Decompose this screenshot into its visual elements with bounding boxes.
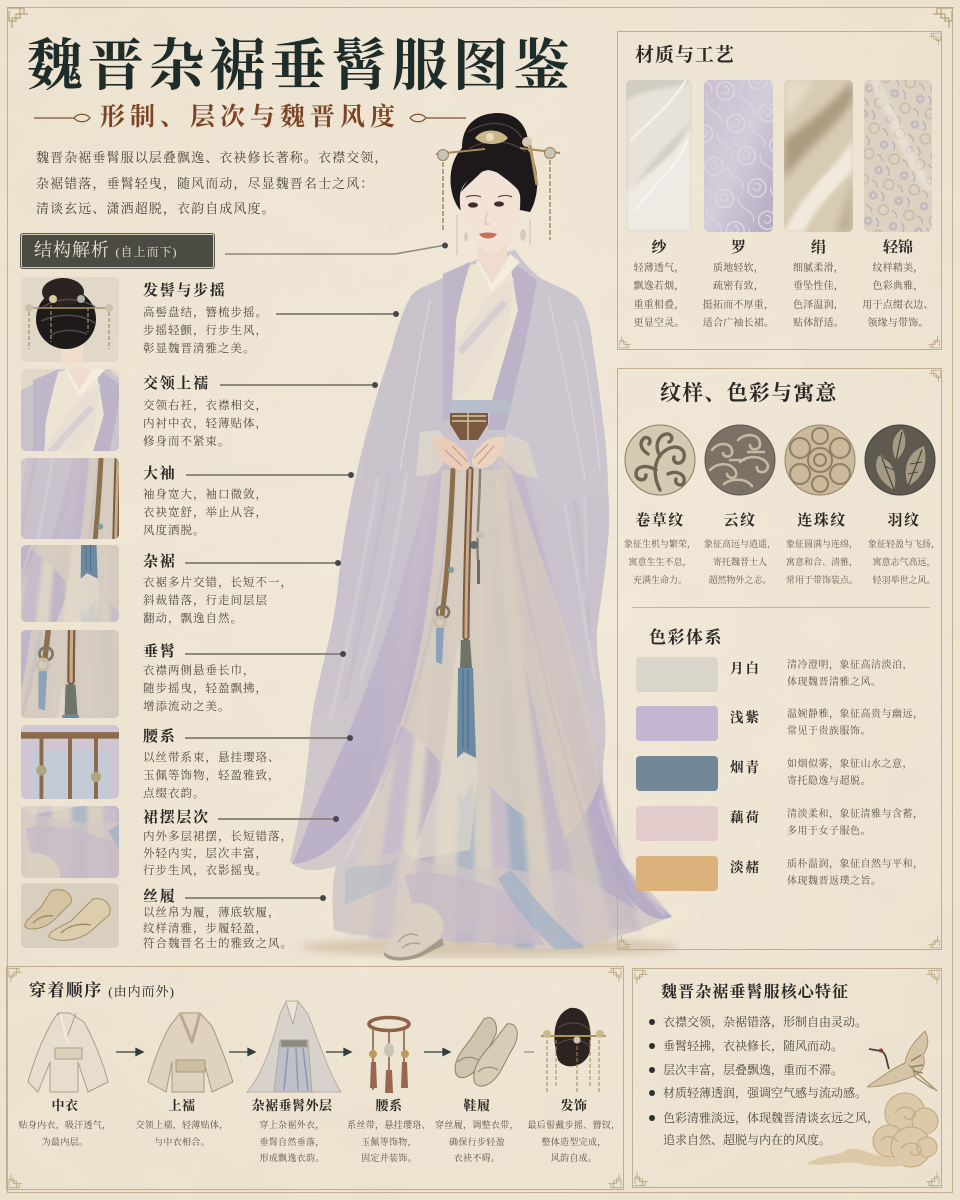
item description: 彰显魏晋清雅之美。 bbox=[143, 343, 256, 355]
item description bbox=[143, 488, 268, 537]
colour row: 浅紫 bbox=[636, 706, 926, 742]
arrow bbox=[228, 1048, 254, 1055]
name: 烟青 bbox=[730, 760, 761, 775]
step name: 中衣 bbox=[51, 1098, 78, 1113]
item description: 内衬中衣，轻薄贴体， bbox=[143, 418, 268, 430]
waist belt bbox=[450, 400, 510, 413]
description: 用于点缀衣边、 bbox=[862, 300, 934, 311]
item description: 内外多层裙摆，长短错落， bbox=[143, 831, 293, 843]
description bbox=[787, 707, 924, 740]
divider bbox=[632, 607, 930, 608]
sheer robe silhouette bbox=[290, 250, 672, 949]
heading: 魏晋杂裾垂髾服核心特征 bbox=[661, 984, 849, 1001]
step text: 衣袂不碍。 bbox=[454, 1153, 500, 1163]
description: 寓意志气高远， bbox=[872, 557, 936, 567]
description: 象征轻盈与飞扬， bbox=[868, 539, 940, 549]
description: 更显空灵。 bbox=[634, 318, 684, 329]
intro text: 清谈玄远、潇洒超脱，衣韵自成风度。 bbox=[36, 201, 276, 216]
swatch bbox=[636, 706, 718, 741]
item description bbox=[143, 399, 268, 448]
description bbox=[787, 757, 913, 790]
step name: 鞋履 bbox=[463, 1098, 490, 1113]
panel: patterns and colours bbox=[617, 368, 942, 950]
swatch bbox=[864, 80, 932, 232]
description: 色彩典雅， bbox=[872, 281, 924, 292]
step text: 整体造型完成， bbox=[541, 1136, 607, 1146]
cloud decoration bbox=[805, 1091, 939, 1177]
title: 魏晋杂裾垂髾服图鉴 bbox=[27, 36, 574, 98]
structure item: 裙摆层次 bbox=[21, 806, 339, 878]
item description: 以丝帛为履，薄底软履， bbox=[143, 907, 280, 919]
ornament: left scroll line bbox=[34, 114, 91, 122]
pattern: 云纹 bbox=[704, 424, 776, 594]
neck bbox=[478, 240, 508, 284]
description bbox=[793, 262, 844, 329]
item heading: 丝履 bbox=[143, 889, 176, 905]
step: 上襦 bbox=[132, 1097, 232, 1167]
description bbox=[634, 262, 684, 329]
description: 多用于女子服色。 bbox=[787, 826, 871, 836]
description bbox=[778, 535, 866, 589]
label: 卷草纹 bbox=[635, 513, 685, 529]
item heading: 交领上襦 bbox=[143, 376, 210, 392]
medallion bbox=[624, 424, 696, 496]
item description bbox=[143, 664, 268, 713]
label: 羽纹 bbox=[887, 513, 920, 529]
description: 领缘与带饰。 bbox=[867, 318, 929, 329]
description: 疏密有致， bbox=[713, 281, 764, 292]
label: 纱 bbox=[651, 240, 666, 256]
crane decoration bbox=[867, 1031, 939, 1093]
upper robe left bbox=[363, 268, 460, 480]
intro text: 魏晋杂裾垂髾服以层叠飘逸、衣袂修长著称。衣襟交领， bbox=[36, 150, 389, 165]
description: 贴体舒适。 bbox=[793, 318, 844, 329]
description: 象征圆满与连绵， bbox=[786, 539, 858, 549]
left lapel band bbox=[443, 262, 470, 420]
description: 温婉静雅，象征高贵与幽远， bbox=[787, 709, 924, 720]
step name: 腰系 bbox=[375, 1098, 402, 1113]
colour row: 淡赭 bbox=[636, 856, 926, 892]
description bbox=[616, 535, 704, 589]
item description: 纹样清雅，步履轻盈， bbox=[143, 923, 268, 935]
description: 常用于带饰装点。 bbox=[786, 575, 858, 585]
description: 飘逸若烟， bbox=[634, 281, 684, 292]
garment: 中衣 bbox=[28, 1012, 108, 1092]
material: 罗 bbox=[703, 80, 774, 329]
thumbnail: skirt bbox=[21, 545, 119, 622]
intro text: 杂裾错落，垂髾轻曳，随风而动，尽显魏晋名士之风： bbox=[36, 176, 374, 190]
pattern: 羽纹 bbox=[864, 424, 936, 594]
colour row: 烟青 bbox=[636, 756, 926, 792]
description: 体现魏晋清雅之风。 bbox=[787, 676, 882, 688]
item description: 高髻盘结，簪梳步摇。 bbox=[143, 307, 268, 319]
item description: 增添流动之美。 bbox=[143, 701, 230, 713]
swatch bbox=[636, 806, 718, 841]
waist sash bbox=[368, 1017, 408, 1092]
arrow bbox=[424, 1048, 450, 1055]
step: 发饰 bbox=[524, 1097, 624, 1167]
hands bbox=[432, 437, 470, 470]
label: 罗 bbox=[731, 240, 746, 256]
thumbnail: hanging ribbons bbox=[21, 630, 119, 718]
description bbox=[858, 260, 938, 334]
face bbox=[460, 170, 520, 254]
bullet 1: 衣襟交领，杂裾错落，形制自由灵动。 bbox=[663, 1015, 867, 1029]
description: 质朴温润，象征自然与平和， bbox=[787, 859, 924, 870]
description: 适合广袖长裙。 bbox=[703, 318, 774, 329]
label: 绢 bbox=[811, 240, 826, 256]
structure item: 发髻与步摇 bbox=[21, 277, 399, 362]
step text: 系丝带，悬挂璎珞、 bbox=[347, 1120, 431, 1130]
item heading: 发髻与步摇 bbox=[143, 283, 227, 299]
description: 寓意和合、清雅， bbox=[786, 557, 858, 567]
item description: 修身而不紧束。 bbox=[143, 436, 230, 448]
bullet 5: 追求自然、超脱与内在的风度。 bbox=[663, 1133, 831, 1147]
description bbox=[696, 535, 784, 589]
description: 质地轻软， bbox=[713, 263, 764, 274]
step: 鞋履 bbox=[427, 1097, 527, 1167]
leader line bbox=[220, 384, 375, 386]
step text bbox=[339, 1117, 439, 1166]
item description: 随步摇曳，轻盈飘拂， bbox=[143, 683, 268, 695]
item description: 点缀衣韵。 bbox=[143, 788, 206, 800]
description: 重重相叠， bbox=[634, 300, 684, 311]
step text: 贴身内衣，吸汗透气， bbox=[18, 1120, 112, 1130]
pattern: 连珠纹 bbox=[784, 424, 856, 594]
label: 轻锦 bbox=[883, 240, 913, 256]
name: 淡赭 bbox=[730, 860, 761, 875]
heading: 材质与工艺 bbox=[635, 45, 735, 66]
bullet 2: 垂髾轻拂，衣袂修长，随风而动。 bbox=[663, 1039, 843, 1053]
step: 中衣 bbox=[15, 1097, 115, 1167]
bullet 4: 材质轻薄透润，强调空气感与流动感。 bbox=[663, 1086, 867, 1100]
colour row: 藕荷 bbox=[636, 806, 926, 842]
structure item: 杂裾 bbox=[21, 545, 341, 625]
item heading: 大袖 bbox=[143, 466, 176, 482]
right lapel band bbox=[488, 252, 537, 430]
description: 细腻柔滑， bbox=[793, 263, 844, 274]
front cream panel bbox=[400, 470, 540, 825]
description: 清冷澄明，象征高洁淡泊， bbox=[787, 660, 913, 671]
panel: materials bbox=[617, 31, 942, 350]
bullet list bbox=[633, 1009, 903, 1159]
lower lilac tier bbox=[405, 873, 545, 945]
description: 寄托魏晋士人 bbox=[713, 557, 767, 567]
thumbnail: collar bbox=[21, 369, 119, 451]
medallion bbox=[704, 424, 776, 496]
leader line bbox=[185, 897, 323, 898]
blue hem tail bbox=[498, 870, 585, 950]
garment: 上襦 bbox=[148, 1012, 232, 1092]
ground shadow bbox=[300, 937, 680, 957]
lavender band left bbox=[292, 420, 452, 864]
description bbox=[703, 262, 774, 329]
label: 连珠纹 bbox=[797, 513, 847, 529]
crossed collar bbox=[476, 254, 520, 292]
step text: 穿丝履，调整衣带， bbox=[435, 1120, 519, 1130]
description: 寓意生生不息， bbox=[628, 557, 692, 567]
ornament: right scroll line bbox=[409, 114, 466, 122]
step text: 最后髻戴步摇、簪钗， bbox=[527, 1120, 620, 1130]
swatch bbox=[636, 856, 718, 891]
thumbnail: sleeve bbox=[21, 458, 119, 539]
garment: 杂裾垂髾外层 bbox=[246, 1000, 340, 1092]
hair ornament bbox=[436, 130, 560, 255]
leader line bbox=[185, 562, 338, 564]
item description: 斜裁错落，行走间层层 bbox=[143, 595, 268, 607]
item description: 交领右衽，衣襟相交， bbox=[143, 400, 268, 412]
leader line bbox=[185, 737, 350, 738]
swatch bbox=[784, 80, 853, 232]
leader line bbox=[276, 313, 396, 314]
shoes bbox=[455, 1017, 517, 1086]
description: 色泽温润， bbox=[793, 300, 844, 311]
step text bbox=[427, 1117, 527, 1166]
step text: 穿上杂裾外衣， bbox=[259, 1120, 325, 1130]
subtitle with ornaments bbox=[34, 103, 466, 131]
swatch bbox=[636, 657, 718, 692]
description: 挺拓而不厚重， bbox=[703, 300, 774, 311]
thumbnail: hair back view bbox=[21, 277, 119, 362]
inner cream bodice bbox=[452, 258, 525, 405]
badge heading: 结构解析 (自上而下) bbox=[34, 240, 178, 260]
description: 轻薄透气， bbox=[634, 263, 684, 274]
item description: 袖身宽大，袖口微敛， bbox=[143, 489, 268, 501]
description: 清淡柔和，象征清雅与含蓄， bbox=[787, 809, 924, 820]
step text: 为最内层。 bbox=[42, 1136, 88, 1146]
description: 超然物外之志。 bbox=[708, 575, 772, 585]
structure item: 交领上襦 bbox=[21, 369, 378, 451]
description: 充满生命力。 bbox=[633, 575, 687, 585]
description: 寄托隐逸与超脱。 bbox=[787, 776, 871, 786]
item description: 以丝带系束，悬挂璎珞、 bbox=[143, 752, 280, 764]
sequence illustrations bbox=[6, 966, 624, 1190]
hair ornament bbox=[540, 1007, 606, 1094]
section badge: 结构解析 bbox=[21, 234, 214, 268]
description bbox=[787, 857, 924, 890]
material: 纱 bbox=[626, 80, 692, 329]
swatch bbox=[636, 756, 718, 791]
right tan sheer panel bbox=[497, 430, 600, 840]
step name: 发饰 bbox=[560, 1098, 588, 1113]
description: 体现魏晋返璞之旨。 bbox=[787, 876, 882, 886]
step text: 玉佩等饰物， bbox=[361, 1136, 417, 1146]
label: 云纹 bbox=[723, 513, 756, 529]
fold lines bbox=[330, 330, 665, 915]
step text bbox=[242, 1117, 342, 1166]
skirt layered strips bbox=[345, 470, 640, 948]
step text: 固定并装饰。 bbox=[361, 1153, 417, 1163]
step text: 交领上襦，轻薄贴体， bbox=[135, 1120, 228, 1130]
upper robe right bbox=[497, 262, 608, 505]
structure item: 丝履 bbox=[21, 883, 326, 950]
small arrow bbox=[524, 1050, 534, 1052]
pattern: 卷草纹 bbox=[624, 424, 696, 594]
description: 象征生机与繁荣， bbox=[624, 539, 696, 549]
item description: 衣袂宽舒，举止从容， bbox=[143, 507, 268, 519]
item description: 风度洒脱。 bbox=[143, 525, 206, 537]
tassel bbox=[460, 640, 472, 668]
description: 纹样精美， bbox=[872, 263, 924, 274]
item description: 外轻内实，层次丰富， bbox=[143, 848, 268, 860]
item description: 玉佩等饰物，轻盈雅致， bbox=[143, 770, 280, 782]
bullet 5: 色彩清雅淡远，体现魏晋清谈玄远之风， bbox=[663, 1111, 879, 1125]
step text: 垂髾自然垂落， bbox=[259, 1136, 325, 1146]
bullet 3: 层次丰富，层叠飘逸，重而不滞。 bbox=[663, 1063, 843, 1077]
description: 轻羽举世之风。 bbox=[872, 575, 936, 585]
thumbnail: hem layers bbox=[21, 806, 119, 878]
item description: 衣裾多片交错，长短不一， bbox=[143, 577, 293, 589]
item description: 行步生风，衣影摇曳。 bbox=[143, 865, 268, 877]
item description: 符合魏晋名士的雅致之风。 bbox=[143, 938, 293, 950]
material: 轻锦 bbox=[864, 80, 932, 330]
panel: dressing order bbox=[6, 966, 624, 1190]
name: 浅紫 bbox=[730, 710, 761, 725]
heading: colour system: 色彩体系 bbox=[649, 628, 723, 647]
step text bbox=[15, 1117, 115, 1150]
arrow bbox=[116, 1048, 142, 1055]
structure item: 腰系 bbox=[21, 725, 353, 800]
structure item: 垂髾 bbox=[21, 630, 346, 718]
step: 腰系 bbox=[339, 1097, 439, 1167]
item heading: 杂裾 bbox=[143, 554, 176, 570]
inner sleeve cuffs bbox=[416, 430, 452, 476]
colour row: 月白 bbox=[636, 657, 926, 693]
hanging strands bbox=[442, 470, 480, 637]
arrow bbox=[326, 1048, 350, 1055]
hem ruffles bbox=[332, 850, 655, 943]
step name: 上襦 bbox=[168, 1098, 196, 1113]
step text: 确保行步轻盈 bbox=[449, 1136, 505, 1146]
description: 如烟似雾，象征山水之意， bbox=[787, 759, 913, 770]
leader line bbox=[185, 653, 343, 654]
bullet 5 bbox=[663, 1107, 879, 1151]
item description bbox=[143, 751, 280, 800]
item heading: 裙摆层次 bbox=[143, 810, 210, 826]
step text bbox=[132, 1117, 232, 1150]
hair back bbox=[450, 113, 537, 212]
leader: figure overall bbox=[225, 242, 448, 255]
item description bbox=[143, 576, 293, 625]
swatch bbox=[626, 80, 692, 232]
medallion bbox=[864, 424, 936, 496]
description bbox=[787, 807, 924, 840]
description bbox=[860, 535, 948, 589]
heading: 纹样、色彩与寓意 bbox=[660, 381, 838, 405]
heading: 穿着顺序 (由内而外) bbox=[29, 981, 175, 1000]
medallion bbox=[784, 424, 856, 496]
shoe bbox=[384, 903, 444, 957]
item description bbox=[143, 306, 268, 355]
item heading: 腰系 bbox=[143, 729, 176, 745]
lavender band right bbox=[497, 430, 672, 919]
panel: core features bbox=[632, 968, 942, 1188]
leader line bbox=[218, 818, 336, 820]
item heading: 垂髾 bbox=[143, 644, 176, 660]
item description bbox=[143, 906, 293, 950]
description: 垂坠性佳， bbox=[793, 281, 844, 292]
structure item: 大袖 bbox=[21, 458, 354, 539]
main figure illustration bbox=[290, 113, 678, 960]
subtitle text: 形制、层次与魏晋风度 bbox=[100, 104, 400, 131]
step: 杂裾垂髾外层 bbox=[242, 1097, 342, 1167]
name: 藕荷 bbox=[730, 810, 761, 825]
item description bbox=[143, 830, 293, 877]
step text bbox=[524, 1117, 624, 1166]
swatch bbox=[704, 80, 773, 232]
description: 象征高远与逍遥， bbox=[704, 539, 776, 549]
step name: 杂裾垂髾外层 bbox=[251, 1098, 332, 1113]
leader line bbox=[186, 474, 351, 476]
description: 常见于贵族服饰。 bbox=[787, 726, 871, 736]
thumbnail: silk shoes bbox=[21, 883, 119, 948]
material: 绢 bbox=[784, 80, 853, 329]
step text: 与中衣相合。 bbox=[154, 1136, 210, 1146]
item description: 步摇轻颤，行步生风， bbox=[143, 325, 268, 337]
name: 月白 bbox=[730, 661, 761, 676]
description bbox=[787, 658, 913, 691]
intro text bbox=[36, 150, 389, 216]
item description: 翻动，飘逸自然。 bbox=[143, 613, 243, 625]
step text: 风韵自成。 bbox=[551, 1153, 597, 1163]
step text: 形成飘逸衣韵。 bbox=[259, 1153, 325, 1163]
item description: 衣襟两侧悬垂长巾， bbox=[143, 665, 256, 677]
thumbnail: waist sash bbox=[21, 725, 119, 799]
